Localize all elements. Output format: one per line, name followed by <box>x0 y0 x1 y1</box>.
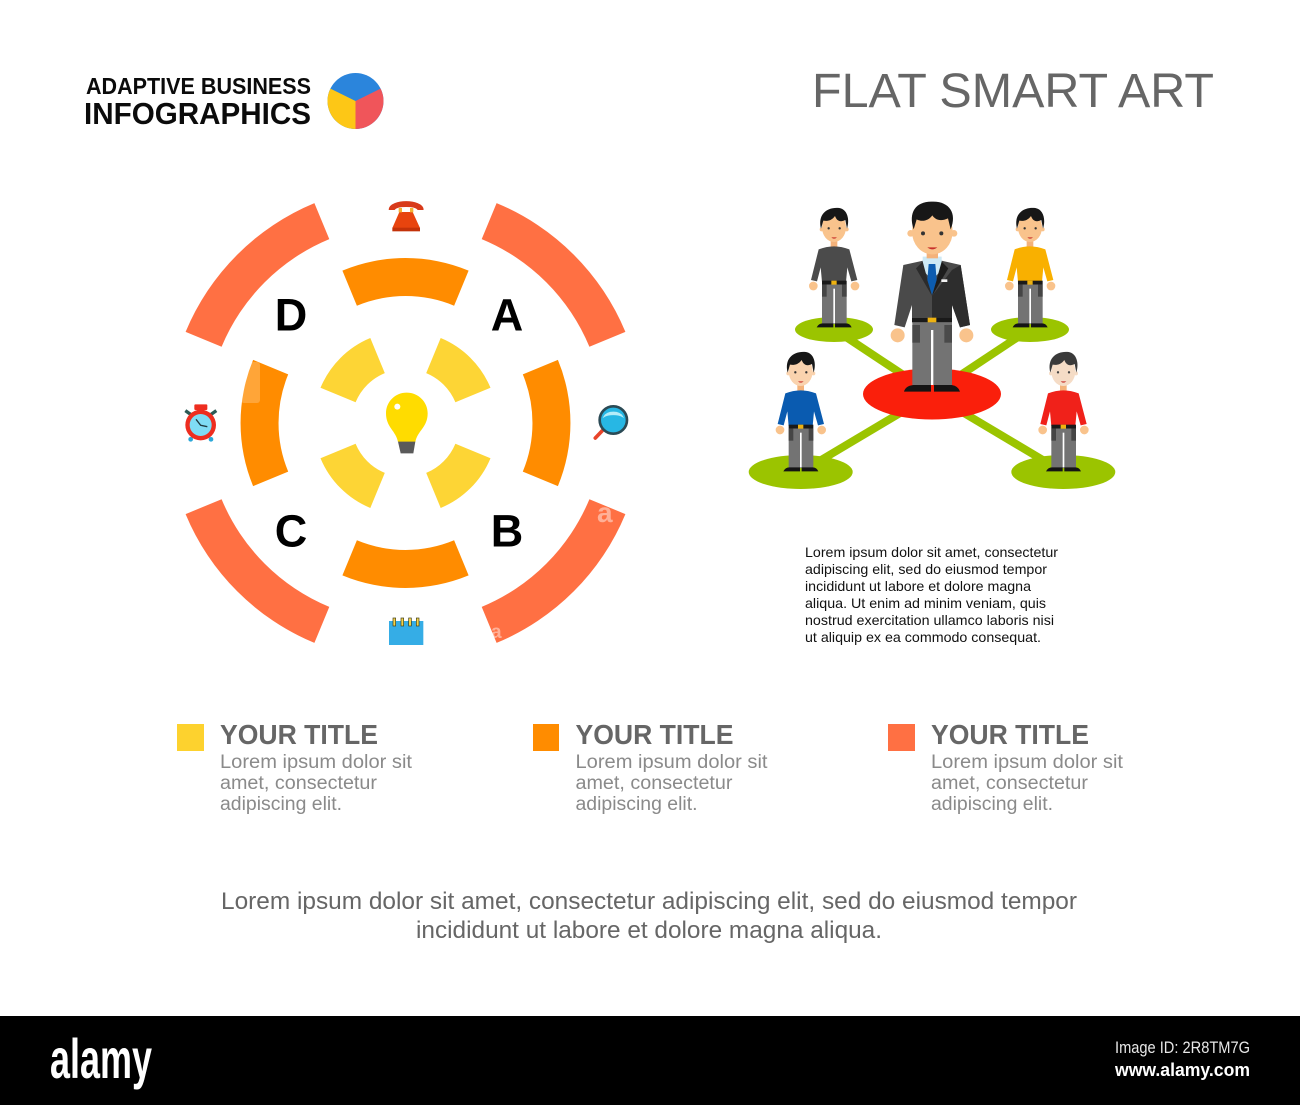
inner ring segments <box>320 338 490 508</box>
image watermark traces: a <box>597 497 613 528</box>
team network diagram <box>749 202 1115 489</box>
green platforms <box>749 317 1115 489</box>
body paragraph <box>805 544 1058 645</box>
legend text: amet, consectetur <box>931 773 1089 794</box>
outer ring segments <box>186 203 625 643</box>
body paragraph: aliqua. Ut enim ad minim veniam, quis <box>805 595 1046 611</box>
legend text: Lorem ipsum dolor sit <box>576 752 768 773</box>
image watermark traces <box>241 362 613 643</box>
legend text: amet, consectetur <box>220 773 378 794</box>
person: central manager in suit <box>891 202 973 392</box>
image watermark traces: a <box>491 622 502 643</box>
body paragraph: Lorem ipsum dolor sit amet, consectetur <box>805 544 1058 560</box>
title: FLAT SMART ART <box>812 65 1214 118</box>
alamy logo: alamy <box>50 1027 152 1090</box>
legend text <box>576 752 768 815</box>
legend text: adipiscing elit. <box>220 794 342 815</box>
legend swatch <box>533 724 559 751</box>
bottom caption: Lorem ipsum dolor sit amet, consectetur adipiscing elit, sed do eiusmod tempor <box>221 888 1077 915</box>
section letters: C <box>275 506 307 556</box>
bottom caption: incididunt ut labore et dolore magna aliqua. <box>416 917 882 944</box>
body paragraph: ut aliquip ex ea commodo consequat. <box>805 629 1041 645</box>
logo: adaptive business infographics <box>84 73 384 131</box>
section letters: D <box>275 290 307 340</box>
legend item: coral <box>888 719 1124 815</box>
icon: telephone <box>389 202 423 231</box>
legend heading: YOUR TITLE <box>220 719 378 750</box>
logo text: ADAPTIVE BUSINESS <box>86 73 311 99</box>
icon: notepad <box>389 618 423 645</box>
connector lines <box>801 329 1063 472</box>
person: top left, grey sweater <box>809 208 859 327</box>
person: bottom left, blue sweater <box>776 352 826 471</box>
legend heading: YOUR TITLE <box>931 719 1089 750</box>
section letters: A <box>491 290 523 340</box>
legend item: yellow <box>177 719 413 815</box>
legend text: Lorem ipsum dolor sit <box>931 752 1124 773</box>
legend swatch <box>888 724 915 751</box>
website: www.alamy.com <box>1114 1060 1250 1080</box>
icon: light bulb <box>386 393 428 453</box>
legend text: Lorem ipsum dolor sit <box>220 752 413 773</box>
body paragraph: adipiscing elit, sed do eiusmod tempor <box>805 561 1047 577</box>
image id: Image ID: 2R8TM7G <box>1115 1038 1250 1057</box>
section letters: B <box>491 506 523 556</box>
person: top right, yellow sweater <box>1005 208 1055 327</box>
legend text: amet, consectetur <box>576 773 733 794</box>
icon: alarm clock <box>185 404 216 442</box>
body paragraph: nostrud exercitation ullamco laboris nisi <box>805 612 1054 628</box>
legend text <box>931 752 1124 815</box>
legend text: adipiscing elit. <box>931 794 1053 815</box>
middle ring segments <box>241 258 570 588</box>
red center platform <box>863 368 1001 420</box>
logo text: INFOGRAPHICS <box>84 96 311 131</box>
bottom caption <box>221 888 1077 944</box>
footer bar <box>0 1016 1300 1105</box>
legend text: adipiscing elit. <box>576 794 698 815</box>
person: bottom right, red sweater <box>1038 352 1089 471</box>
logo text <box>84 73 311 131</box>
legend item: orange <box>533 719 768 815</box>
logo pie icon <box>328 73 384 129</box>
concentric ring diagram <box>185 202 627 645</box>
legend text <box>220 752 413 815</box>
section letters <box>275 290 523 556</box>
legend heading: YOUR TITLE <box>576 719 734 750</box>
body paragraph: incididunt ut labore et dolore magna <box>805 578 1031 594</box>
icon: magnifier <box>595 406 627 438</box>
legend swatch <box>177 724 204 751</box>
